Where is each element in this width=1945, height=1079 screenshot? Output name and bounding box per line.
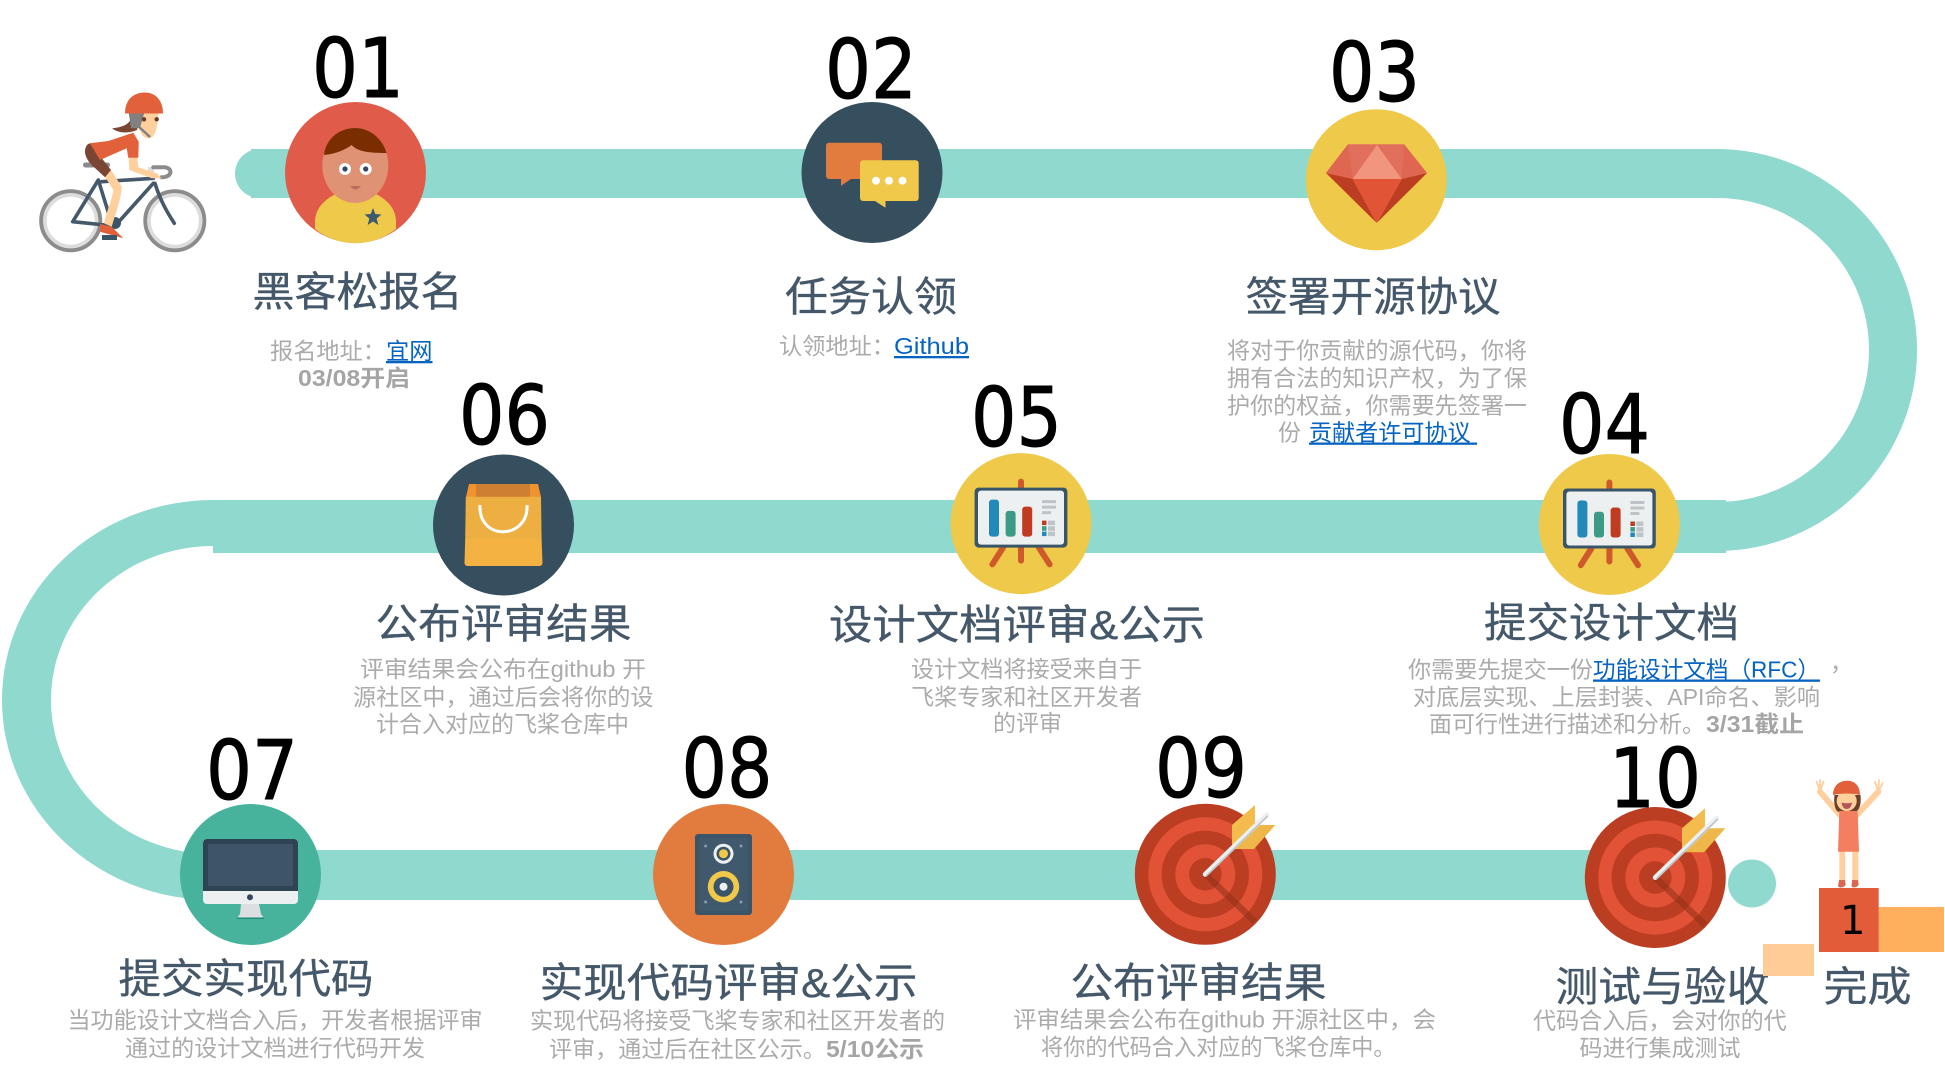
number 05: 05 <box>971 371 1062 466</box>
description: 面可行性进行描述和分析。 <box>1429 711 1705 737</box>
description: 份 <box>1278 420 1301 446</box>
description: 评审结果会公布在github 开源社区中 ，会 <box>1013 1000 1436 1034</box>
number 10: 10 <box>1609 732 1701 827</box>
icon: cyclist start <box>41 92 204 250</box>
number 04: 04 <box>1559 378 1650 473</box>
description: 将你的代码合入对应的飞桨仓库中。 <box>1041 1034 1396 1060</box>
description: 源社区中，通过后会将你的设 <box>353 678 654 712</box>
step 08 panel <box>530 722 945 1064</box>
description <box>68 1001 482 1061</box>
step 09 panel <box>1013 722 1436 1060</box>
step 07 panel <box>68 724 482 1061</box>
description <box>270 332 432 391</box>
icon: celebrating person <box>1817 780 1883 887</box>
heading: 签署开源协议 <box>1246 274 1500 320</box>
number 09: 09 <box>1155 722 1247 817</box>
description <box>530 1008 945 1064</box>
step 05 panel <box>829 371 1205 736</box>
step 02 panel <box>779 23 969 361</box>
step 06 panel <box>353 369 654 737</box>
icon: target with arrow <box>1585 807 1726 948</box>
description: 3/31截止 <box>1706 711 1804 737</box>
description: 宜网 <box>386 338 432 364</box>
description: 飞桨专家和社区开发者 <box>911 684 1142 710</box>
description: ， <box>1824 650 1847 684</box>
description: 03/08开启 <box>298 365 410 391</box>
track end dot <box>1728 860 1776 908</box>
heading: 提交设计文档 <box>1484 600 1739 646</box>
description: 报名地址： <box>270 332 386 366</box>
description: 当功能设计文档合入后，开发者根据评审 <box>68 1001 482 1035</box>
number 01: 01 <box>312 22 404 117</box>
step 03 panel <box>1227 26 1527 446</box>
description: 实现代码将接受飞桨专家和社区开发者的 <box>530 1008 945 1034</box>
description <box>1227 332 1527 446</box>
icon: desktop monitor <box>180 804 321 945</box>
description <box>1533 1002 1787 1061</box>
step 10 panel <box>1533 732 1787 1061</box>
step 01 panel <box>252 22 462 391</box>
number 03: 03 <box>1329 26 1420 121</box>
heading: 设计文档评审&公示 <box>829 602 1205 648</box>
step 04 panel <box>1408 378 1847 737</box>
description: 评审，通过后在社区公示。 <box>549 1030 826 1064</box>
description: 将对于你贡献的源代码，你将 <box>1227 332 1527 366</box>
number 08: 08 <box>682 722 772 817</box>
icon: presentation board <box>950 453 1092 594</box>
number 06: 06 <box>459 369 550 464</box>
icon: presentation board <box>1539 454 1680 595</box>
podium blocks <box>1763 888 1944 976</box>
description: 评审结果会公布在github 开 <box>360 656 646 682</box>
description <box>1408 650 1847 737</box>
description: 拥有合法的知识产权，为了保 <box>1227 359 1527 393</box>
heading: 任务认领 <box>785 274 957 320</box>
description: 认领地址： <box>779 327 895 361</box>
icon: chat bubbles <box>802 102 942 243</box>
description <box>779 327 969 361</box>
heading: 公布评审结果 <box>1070 960 1326 1006</box>
description: 贡献者许可协议 <box>1309 420 1477 446</box>
description <box>1013 1000 1436 1060</box>
description: 代码合入后，会对你的代 <box>1533 1002 1787 1036</box>
icon: ruby gem <box>1306 109 1447 250</box>
description: 5/10公示 <box>826 1036 924 1062</box>
description: 设计文档将接受来自于 <box>911 656 1142 682</box>
podium blocks: 1 <box>1840 898 1865 944</box>
number 07: 07 <box>206 724 298 819</box>
heading: 提交实现代码 <box>118 956 374 1002</box>
winding track path <box>2 149 1917 900</box>
number 02: 02 <box>825 23 917 118</box>
icon: target with arrow <box>1135 804 1276 945</box>
description: 通过的设计文档进行代码开发 <box>125 1035 425 1061</box>
description: 计合入对应的飞桨仓库中 <box>376 711 629 737</box>
finish podium panel <box>1763 780 1944 1010</box>
heading: 公布评审结果 <box>376 601 632 647</box>
icon: speaker <box>653 804 794 945</box>
description <box>911 656 1142 736</box>
description: Github <box>894 333 969 359</box>
description: 对底层实现、上层封装、API命名、影响 <box>1413 684 1820 710</box>
description: 你需要先提交一份 <box>1408 656 1593 682</box>
heading: 完成 <box>1824 964 1912 1010</box>
description: 的评审 <box>993 710 1062 736</box>
description <box>353 656 654 737</box>
heading: 实现代码评审&公示 <box>540 960 918 1006</box>
description: 护你的权益，你需要先签署一 <box>1227 386 1527 420</box>
icon: person avatar <box>285 102 426 243</box>
description: 功能设计文档（RFC） <box>1593 656 1820 682</box>
description: 码进行集成测试 <box>1580 1035 1740 1061</box>
icon: shopping bag <box>433 454 574 596</box>
heading: 黑客松报名 <box>252 269 462 315</box>
heading: 测试与验收 <box>1556 964 1770 1010</box>
